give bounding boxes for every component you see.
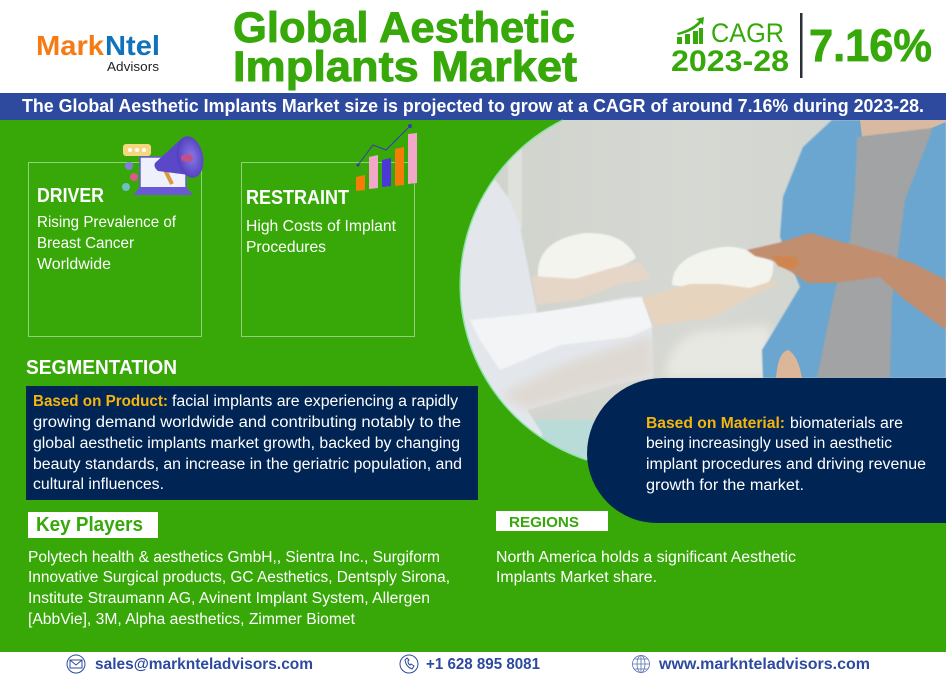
heading: segmentation: SEGMENTATION [26, 357, 177, 379]
text: key players list: Innovative Surgical products, GC Aesthetics, Dentsply Sirona, [28, 569, 450, 586]
panel: driver [28, 162, 202, 336]
restraint text: High Costs of Implant [246, 218, 397, 235]
CAGR block [671, 13, 932, 78]
patient denim jacket [762, 120, 946, 378]
heading: regions: REGIONS [509, 514, 579, 531]
text: key players list [28, 549, 450, 628]
text: key players list: Institute Straumann AG, Avinent Implant System, Allergen [28, 590, 430, 607]
driver heading: DRIVER [37, 185, 104, 207]
heading: key players: Key Players [36, 514, 143, 536]
text: key players list: [AbbVie], 3M, Alpha aesthetics, Zimmer Biomet [28, 611, 356, 628]
patient pointing hand and arm [747, 233, 946, 330]
driver text: Rising Prevalence of [37, 214, 177, 231]
icon: phone [400, 655, 418, 673]
CAGR period: 2023-28 [671, 45, 789, 78]
panel: based on product: global aesthetic implants market growth, backed by changing [33, 435, 460, 452]
implant right [672, 247, 773, 292]
text: key players list: Polytech health & aesthetics GmbH,, Sientra Inc., Surgiform [28, 549, 440, 566]
driver text: Worldwide [37, 256, 111, 273]
driver text: Breast Cancer [37, 235, 134, 252]
panel: based on material: biomaterials are [790, 415, 903, 432]
text: regions: North America holds a significant Aesthetic [496, 549, 796, 566]
restraint heading: RESTRAINT [246, 187, 349, 209]
panel: based on material: being increasingly used in aesthetic [646, 435, 892, 452]
summary banner: The Global Aesthetic Implants Market size is projected to grow at a CAGR of around 7.16% during 2023-28. [22, 95, 924, 116]
panel: based on product: facial implants are experiencing a rapidly [172, 393, 458, 410]
text: regions [496, 549, 796, 586]
icon: growth chart [677, 17, 704, 44]
website: www.marknteladvisors.com [658, 656, 870, 673]
title: Global Aesthetic [233, 4, 575, 52]
panel: based on material: growth for the market. [646, 477, 804, 494]
panel: based on material: Based on Material: [646, 415, 785, 432]
heading: regions [496, 511, 608, 531]
title [233, 4, 577, 91]
title: Implants Market [233, 43, 577, 91]
logo: MarkNtel Advisors: Ntel [105, 30, 160, 61]
icon: laptop and megaphone [122, 134, 207, 195]
panel: based on product: cultural influences. [33, 476, 164, 493]
icon: rising bar chart [356, 124, 417, 191]
photo: doctor showing implants to patient [450, 120, 946, 465]
CAGR value: 7.16% [809, 20, 932, 71]
panel: based on material: implant procedures and driving revenue [646, 456, 926, 473]
logo: MarkNtel Advisors: Mark [36, 30, 104, 61]
gloved hand left [532, 262, 651, 305]
patient lower arm [776, 350, 802, 378]
email address: sales@marknteladvisors.com [95, 656, 313, 673]
patient neck [860, 120, 946, 137]
gloved hand right [642, 280, 778, 326]
restraint text: Procedures [246, 239, 326, 256]
icon: email [67, 655, 85, 673]
driver text [37, 214, 177, 273]
phone number: +1 628 895 8081 [426, 656, 540, 673]
logo: MarkNtel Advisors [36, 30, 160, 74]
implant left [538, 233, 636, 280]
panel: based on product: Based on Product: [33, 393, 168, 410]
green background panel [0, 120, 946, 652]
patient grey shirt [817, 128, 933, 378]
footer [0, 652, 946, 674]
panel: based on product [26, 386, 478, 500]
panel: based on product: growing demand worldwide and contributing notably to the [33, 414, 461, 431]
logo: MarkNtel Advisors: Advisors [107, 59, 160, 74]
text: regions: Implants Market share. [496, 569, 657, 586]
panel: restraint [242, 162, 414, 336]
doctor coat [461, 179, 653, 438]
panel: based on product: beauty standards, an increase in the geriatric population, and [33, 456, 462, 473]
panel: based on material [587, 378, 946, 523]
CAGR label: CAGR [711, 18, 784, 48]
icon: globe [632, 656, 650, 672]
restraint text [246, 218, 397, 256]
